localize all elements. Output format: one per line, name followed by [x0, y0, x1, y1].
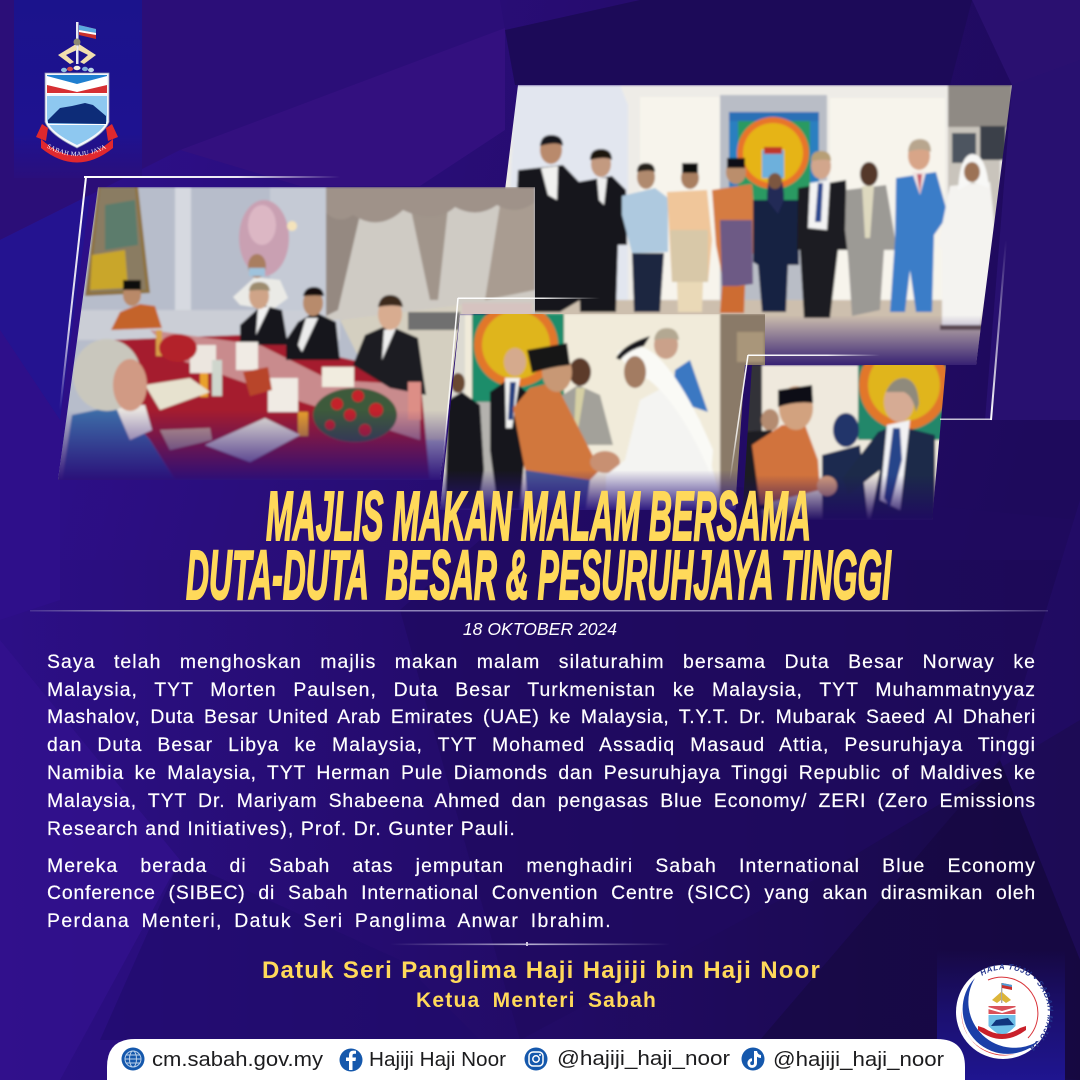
date: 18 OKTOBER 2024 — [463, 619, 617, 639]
title — [186, 477, 892, 614]
website: cm.sabah.gov.my — [152, 1049, 323, 1071]
photo: dinner table — [50, 187, 540, 487]
small crest — [978, 983, 1026, 1039]
curtains — [326, 205, 535, 320]
buffet table — [340, 316, 460, 440]
paragraph one: Saya telah menghoskan majlis makan malam silaturahim bersama Duta Besar Norway ke — [47, 651, 1036, 673]
persons in group photo — [515, 165, 582, 312]
paragraph one: dan Duta Besar Libya ke Malaysia, TYT Mohamed Assadiq Masaud Attia, Pesuruhjaya Tinggi — [47, 734, 1036, 756]
paragraph one — [47, 651, 1036, 840]
facebook name: Hajiji Haji Noor — [369, 1049, 506, 1071]
paragraph one: Research and Initiatives), Prof. Dr. Gunter Pauli. — [47, 818, 516, 840]
top-left blue column — [14, 0, 142, 178]
icon: facebook — [340, 1048, 362, 1072]
scroll motto: SABAH MAJU JAYA — [47, 144, 106, 156]
photo: handshake with UAE ambassador — [440, 303, 770, 514]
icon: instagram — [524, 1048, 548, 1070]
signature divider — [390, 942, 670, 946]
paragraph one: Malaysia, TYT Dr. Mariyam Shabeena Ahmed dan pengasas Blue Economy/ ZERI (Zero Emissions — [47, 790, 1036, 812]
pink flower bouquet — [239, 200, 289, 276]
signature name: Datuk Seri Panglima Haji Hajiji bin Haji Noor — [262, 957, 821, 984]
tiktok handle: @hajiji_haji_noor — [773, 1049, 944, 1071]
flag on pole — [76, 22, 96, 64]
server — [233, 277, 288, 310]
photo: handshake with Norwegian ambassador — [742, 365, 946, 520]
photo: group portrait — [500, 85, 1020, 370]
shield — [45, 73, 109, 148]
painting — [85, 187, 150, 296]
white robe man — [606, 390, 718, 498]
bottom-right blue column — [937, 950, 1065, 1080]
icon: tiktok — [742, 1048, 764, 1070]
title divider — [30, 610, 1048, 612]
instagram handle: @hajiji_haji_noor — [557, 1048, 730, 1070]
red flower centrepiece — [313, 388, 397, 442]
men at table — [240, 305, 288, 345]
icon: web globe — [122, 1048, 144, 1070]
signature role: Ketua Menteri Sabah — [416, 989, 657, 1012]
people — [445, 392, 484, 510]
table — [112, 335, 430, 480]
mosaic artwork — [729, 112, 819, 202]
crest: Sabah coat of arms — [36, 22, 118, 162]
table items — [190, 345, 216, 373]
paragraph one: Malaysia, TYT Morten Paulsen, Duta Besar Turkmenistan ke Malaysia, TYT Muhammatnyyaz — [47, 679, 1036, 701]
paragraph two: Conference (SIBEC) di Sabah International Convention Centre (SICC) yang akan dirasmikan oleh — [47, 882, 1036, 904]
scroll motto — [36, 124, 118, 162]
paragraph one: Mashalov, Duta Besar United Arab Emirates (UAE) ke Malaysia, T.Y.T. Dr. Mubarak Saeed Al Dhaheri — [47, 706, 1036, 728]
man in orange shaking hands — [513, 382, 600, 490]
emblem: Hala Tuju Sabah Maju Jaya: HALA TUJU • SABAH MAJU JAYA — [980, 964, 1054, 1051]
white frame lines around photos — [60, 176, 1006, 480]
seated man in orange — [111, 304, 162, 330]
art behind — [472, 314, 564, 402]
paragraph two: Mereka berada di Sabah atas jemputan menghadiri Sabah International Blue Economy — [47, 855, 1036, 877]
footer pill — [107, 1039, 965, 1080]
beads — [61, 66, 94, 72]
foreground man blue suit — [64, 408, 172, 477]
paragraph two: Perdana Menteri, Datuk Seri Panglima Anwar Ibrahim. — [47, 910, 612, 932]
arms holding pole — [58, 44, 96, 64]
paragraph two — [47, 855, 1036, 932]
paragraph one: Namibia ke Malaysia, TYT Herman Pule Diamonds dan Pesuruhjaya Tinggi Republic of Maldives ke — [47, 762, 1036, 784]
